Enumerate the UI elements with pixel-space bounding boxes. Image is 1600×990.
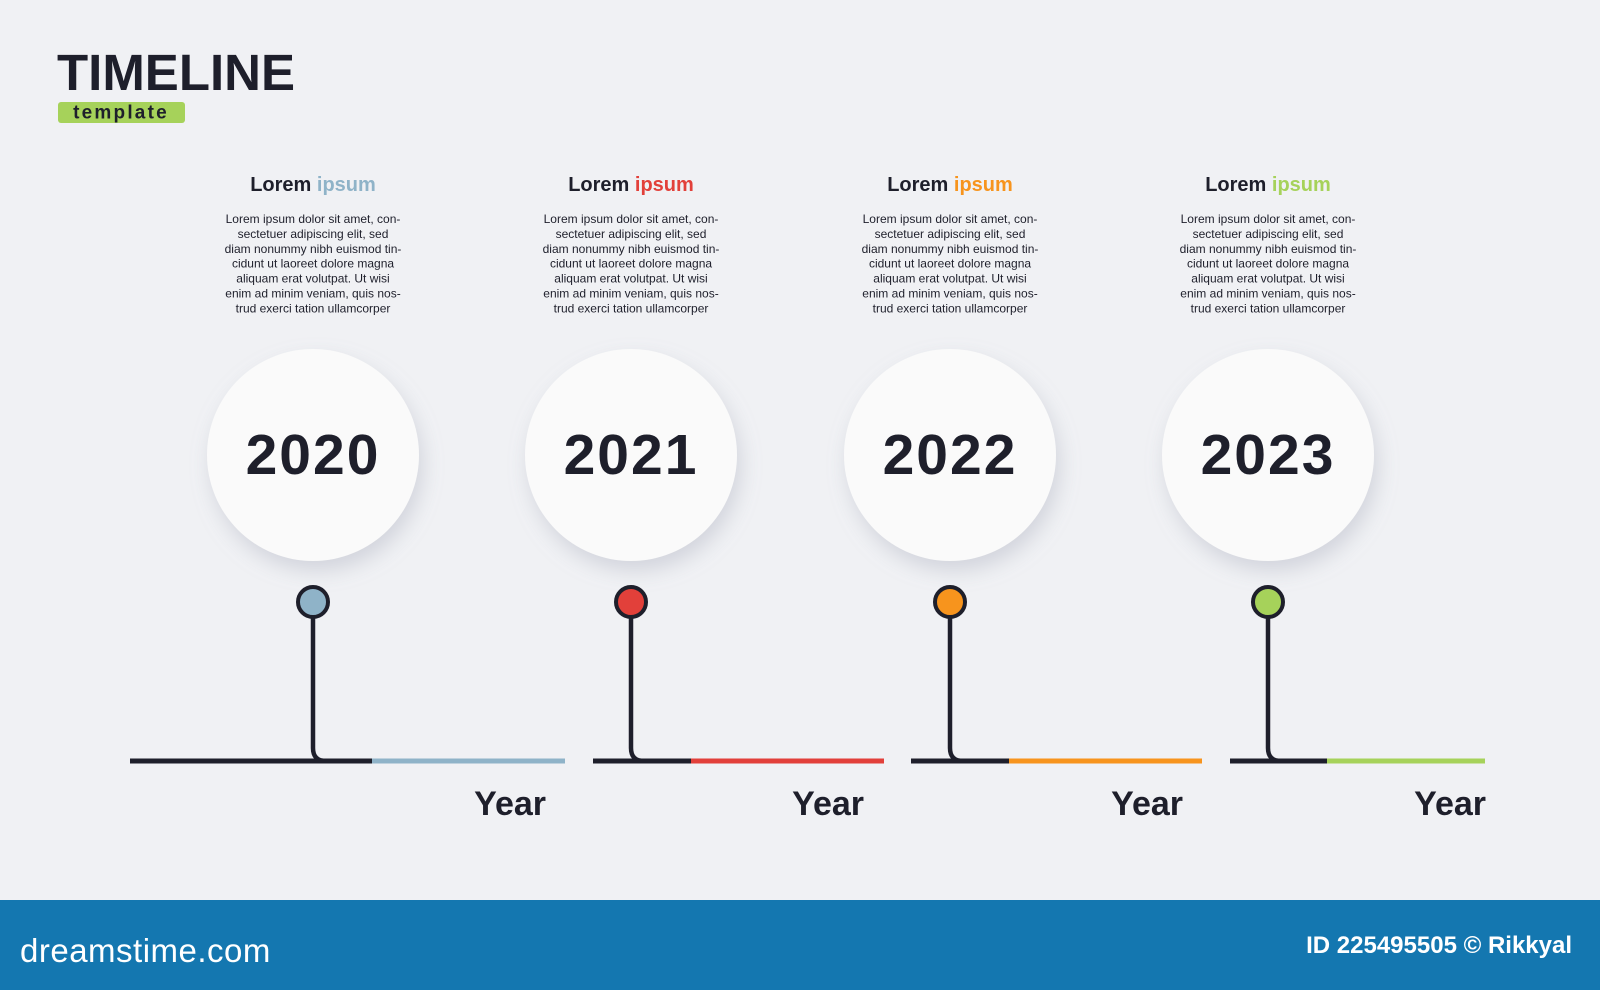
body text: diam nonummy nibh euismod tin- — [543, 242, 719, 256]
body text: diam nonummy nibh euismod tin- — [225, 242, 401, 256]
heading: Lorem ipsum — [887, 174, 1013, 196]
step 2023 — [1162, 174, 1486, 823]
body text: Lorem ipsum dolor sit amet, con- — [863, 212, 1037, 226]
body text: diam nonummy nibh euismod tin- — [1180, 242, 1356, 256]
body text: aliquam erat volutpat. Ut wisi — [236, 272, 390, 286]
heading: Lorem ipsum — [250, 174, 376, 196]
year circle — [525, 349, 737, 561]
step 2022 — [844, 174, 1202, 823]
body text: trud exerci tation ullamcorper — [554, 301, 708, 315]
step 2020 — [130, 174, 565, 823]
step 2021 — [525, 174, 884, 823]
body text: cidunt ut laoreet dolore magna — [1187, 257, 1349, 271]
body text: sectetuer adipiscing elit, sed — [875, 227, 1025, 241]
brand text: dreamstime.com — [20, 932, 271, 969]
year label: Year — [1111, 785, 1183, 823]
body text: enim ad minim veniam, quis nos- — [1180, 286, 1356, 300]
year circle: 2021 — [564, 423, 698, 487]
body text: sectetuer adipiscing elit, sed — [1193, 227, 1343, 241]
body text: sectetuer adipiscing elit, sed — [238, 227, 388, 241]
body text: Lorem ipsum dolor sit amet, con- — [226, 212, 400, 226]
body text: enim ad minim veniam, quis nos- — [225, 286, 401, 300]
marker and line — [1230, 587, 1485, 761]
body text: aliquam erat volutpat. Ut wisi — [873, 272, 1027, 286]
body text: sectetuer adipiscing elit, sed — [556, 227, 706, 241]
body text: cidunt ut laoreet dolore magna — [232, 257, 394, 271]
title: TIMELINE — [57, 44, 295, 101]
body text: enim ad minim veniam, quis nos- — [862, 286, 1038, 300]
body text: aliquam erat volutpat. Ut wisi — [554, 272, 708, 286]
year circle — [1162, 349, 1374, 561]
footer banner — [0, 900, 1600, 990]
heading: Lorem ipsum — [1205, 174, 1331, 196]
year circle: 2023 — [1201, 423, 1335, 487]
body text: trud exerci tation ullamcorper — [873, 301, 1027, 315]
image id: ID 225495505 © Rikkyal — [1306, 932, 1572, 959]
body text: diam nonummy nibh euismod tin- — [862, 242, 1038, 256]
body text: cidunt ut laoreet dolore magna — [550, 257, 712, 271]
body text: trud exerci tation ullamcorper — [1191, 301, 1345, 315]
body text: aliquam erat volutpat. Ut wisi — [1191, 272, 1345, 286]
body text: Lorem ipsum dolor sit amet, con- — [544, 212, 718, 226]
body text: Lorem ipsum dolor sit amet, con- — [1181, 212, 1355, 226]
marker and line — [911, 587, 1202, 761]
year circle — [207, 349, 419, 561]
year label: Year — [474, 785, 546, 823]
body text: cidunt ut laoreet dolore magna — [869, 257, 1031, 271]
year circle — [844, 349, 1056, 561]
marker and line — [593, 587, 884, 761]
year label: Year — [792, 785, 864, 823]
body text: trud exerci tation ullamcorper — [236, 301, 390, 315]
heading: Lorem ipsum — [568, 174, 694, 196]
year circle: 2020 — [246, 423, 380, 487]
subtitle badge: template — [73, 102, 169, 124]
year label: Year — [1414, 785, 1486, 823]
body text: enim ad minim veniam, quis nos- — [543, 286, 719, 300]
year circle: 2022 — [883, 423, 1017, 487]
marker and line — [130, 587, 565, 761]
